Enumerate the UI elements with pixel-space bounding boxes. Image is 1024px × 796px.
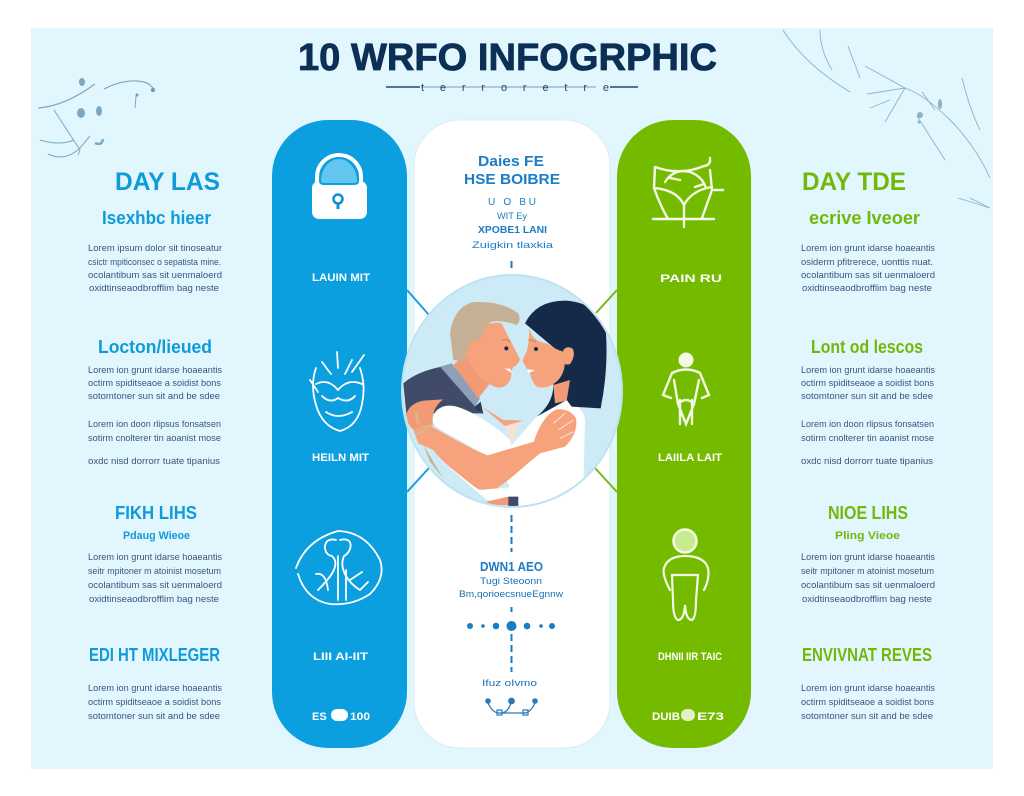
- body text: osiderm pfitrerece, uonttis nuat.: [801, 257, 933, 268]
- label: PAIN RU: [660, 273, 722, 285]
- man's hand: [407, 399, 443, 430]
- woman's neck and face: [553, 380, 570, 403]
- heading: DAY TDE: [802, 168, 906, 196]
- illustration: embracing couple: [402, 275, 622, 508]
- body text: seitr mpitoner m atoinist mosetum: [801, 566, 934, 577]
- body text: Lorem ion grunt idarse hoaeantis: [88, 552, 222, 563]
- man's neck: [454, 357, 490, 398]
- body text: [801, 683, 935, 722]
- label: HEILN MIT: [312, 452, 369, 464]
- eyes and smiles: [504, 346, 508, 350]
- woman's hair back: [525, 301, 607, 417]
- body text: ocolantibum sas sit uenmaloerd: [801, 270, 935, 281]
- label with pill: E73: [697, 711, 724, 723]
- body text: oxdc nisd dorrorr tuate tipanius: [801, 456, 933, 467]
- body text: ocolantibum sas sit uenmaloerd: [801, 580, 935, 591]
- text block: upper center: WIT Ey: [497, 211, 528, 221]
- caption: Ifuz oIvmo: [482, 678, 537, 689]
- connector lines: [407, 290, 617, 492]
- text block: upper center: U O BU: [488, 197, 536, 208]
- subheading: ecrive Iveoer: [809, 208, 920, 228]
- panel: center white column: [414, 120, 610, 748]
- body text: sotomtoner sun sit and be sdee: [801, 711, 933, 722]
- dashed connector with dots: [467, 515, 555, 672]
- body text: oxidtinseaodbrofflim bag neste: [802, 594, 932, 605]
- subtitle rule: terroretre: [421, 82, 609, 94]
- body text: [801, 552, 935, 605]
- heading: Locton/lieued: [98, 337, 212, 357]
- icon: pillow with leaf: [653, 158, 723, 227]
- left column: block 1: [88, 168, 222, 294]
- body text: oxidtinseaodbrofflim bag neste: [89, 283, 219, 294]
- body text: Lorem ion grunt idarse hoaeantis: [801, 552, 935, 563]
- body text: ocolantibum sas sit uenmaloerd: [88, 270, 222, 281]
- label with pill: [312, 709, 370, 723]
- body text: seitr mpitoner m atoinist mosetum: [88, 566, 221, 577]
- text block: lower center: [459, 559, 563, 600]
- woman's hand on shoulder and arm: [413, 409, 576, 490]
- text block: upper center: XPOBE1 LANI: [478, 225, 547, 236]
- text block: lower center: DWN1 AEO: [480, 559, 543, 574]
- body text: sotirm cnolterer tin aoanist mose: [88, 433, 221, 444]
- subheading: Pling Vieoe: [835, 530, 900, 542]
- body text: octirm spiditseaoe a soidist bons: [801, 378, 934, 389]
- heading: Lont od lescos: [811, 337, 923, 357]
- body text: octirm spiditseaoe a soidist bons: [88, 697, 221, 708]
- body text: Lorem ion grunt idarse hoaeantis: [801, 683, 935, 694]
- body text: [88, 683, 222, 722]
- panel: green column: [617, 120, 751, 748]
- label: LAUIN MIT: [312, 272, 370, 284]
- icon: person outline: [664, 530, 708, 620]
- right column: block 3: [801, 503, 935, 605]
- label with pill: DUIB: [652, 711, 680, 723]
- body text: csictr mpiticonsec o sepatista mine.: [88, 257, 221, 268]
- left column: block 4: [88, 645, 222, 722]
- woman's white top: [503, 401, 585, 508]
- right column: block 4: [801, 645, 935, 722]
- body text: [88, 243, 222, 294]
- title: 10 WRFO INFOGRPHIC: [298, 37, 717, 79]
- heading: ENVIVNAT REVES: [802, 645, 932, 665]
- decoration: top-left botanical lines: [38, 78, 155, 157]
- body text: [801, 243, 935, 294]
- body text: Lorem ion grunt idarse hoaeantis: [801, 243, 935, 254]
- right column: block 2: [801, 337, 935, 467]
- icon: network: [486, 698, 537, 715]
- body text: Lorem ion doon rlipsus fonsatsen: [801, 419, 934, 430]
- text block: upper center: HSE BOIBRE: [464, 171, 560, 188]
- heading: DAY LAS: [115, 168, 220, 196]
- heading: NIOE LIHS: [828, 503, 908, 523]
- body text: Lorem ipsum dolor sit tinoseatur: [88, 243, 222, 254]
- body text: Lorem ion grunt idarse hoaeantis: [88, 683, 222, 694]
- body text: oxdc nisd dorrorr tuate tipanius: [88, 456, 220, 467]
- body text: octirm spiditseaoe a soidist bons: [801, 697, 934, 708]
- body text: Lorem ion grunt idarse hoaeantis: [801, 365, 935, 376]
- panel: blue column: [272, 120, 407, 748]
- subheading: Isexhbc hieer: [102, 208, 211, 228]
- label: LIII AI-IIT: [313, 651, 368, 663]
- body text: sotomtoner sun sit and be sdee: [88, 391, 220, 402]
- label with pill: [652, 709, 724, 723]
- body text: Lorem ion doon rlipsus fonsatsen: [88, 419, 221, 430]
- long hair: [423, 445, 443, 478]
- body text: [801, 365, 935, 467]
- body text: [88, 365, 222, 467]
- body text: Lorem ion grunt idarse hoaeantis: [88, 365, 222, 376]
- text block: lower center: Tugi Steoonn: [480, 576, 542, 587]
- icon: padlock: [312, 155, 367, 219]
- man's collar: [440, 363, 480, 407]
- man's face: [465, 323, 520, 388]
- left column: block 3: [88, 503, 222, 605]
- label: DHNII IIR TAIC: [658, 651, 722, 663]
- body text: octirm spiditseaoe a soidist bons: [88, 378, 221, 389]
- subheading: Pdaug Wieoe: [123, 530, 190, 542]
- label with pill: ES: [312, 711, 327, 723]
- label with pill: 100: [350, 711, 370, 723]
- heading: EDI HT MIXLEGER: [89, 645, 220, 665]
- icon: person with vest: [663, 352, 709, 424]
- label: LAIILA LAIT: [658, 452, 722, 464]
- right column: block 1: [801, 168, 935, 294]
- body text: [88, 552, 222, 605]
- heading: FIKH LIHS: [115, 503, 197, 523]
- man's vest: [403, 367, 483, 417]
- left column: block 2: [88, 337, 222, 467]
- icon: face outline: [310, 352, 364, 431]
- body text: sotomtoner sun sit and be sdee: [801, 391, 933, 402]
- text block: lower center: Bm,qorioecsnueEgnnw: [459, 589, 563, 600]
- text block: upper center: Daies FE: [478, 153, 544, 170]
- text block: upper center: Zuigkin tlaxkia: [472, 240, 554, 251]
- decoration: top-right botanical lines: [783, 30, 990, 208]
- body text: oxidtinseaodbrofflim bag neste: [89, 594, 219, 605]
- body text: ocolantibum sas sit uenmaloerd: [88, 580, 222, 591]
- text block: upper center: [464, 153, 560, 251]
- body text: sotomtoner sun sit and be sdee: [88, 711, 220, 722]
- man's white shirt: [432, 406, 512, 456]
- body text: oxidtinseaodbrofflim bag neste: [802, 283, 932, 294]
- icon: brain circle: [296, 531, 382, 604]
- body text: sotirm cnolterer tin aoanist mose: [801, 433, 934, 444]
- man's hair: [450, 302, 520, 362]
